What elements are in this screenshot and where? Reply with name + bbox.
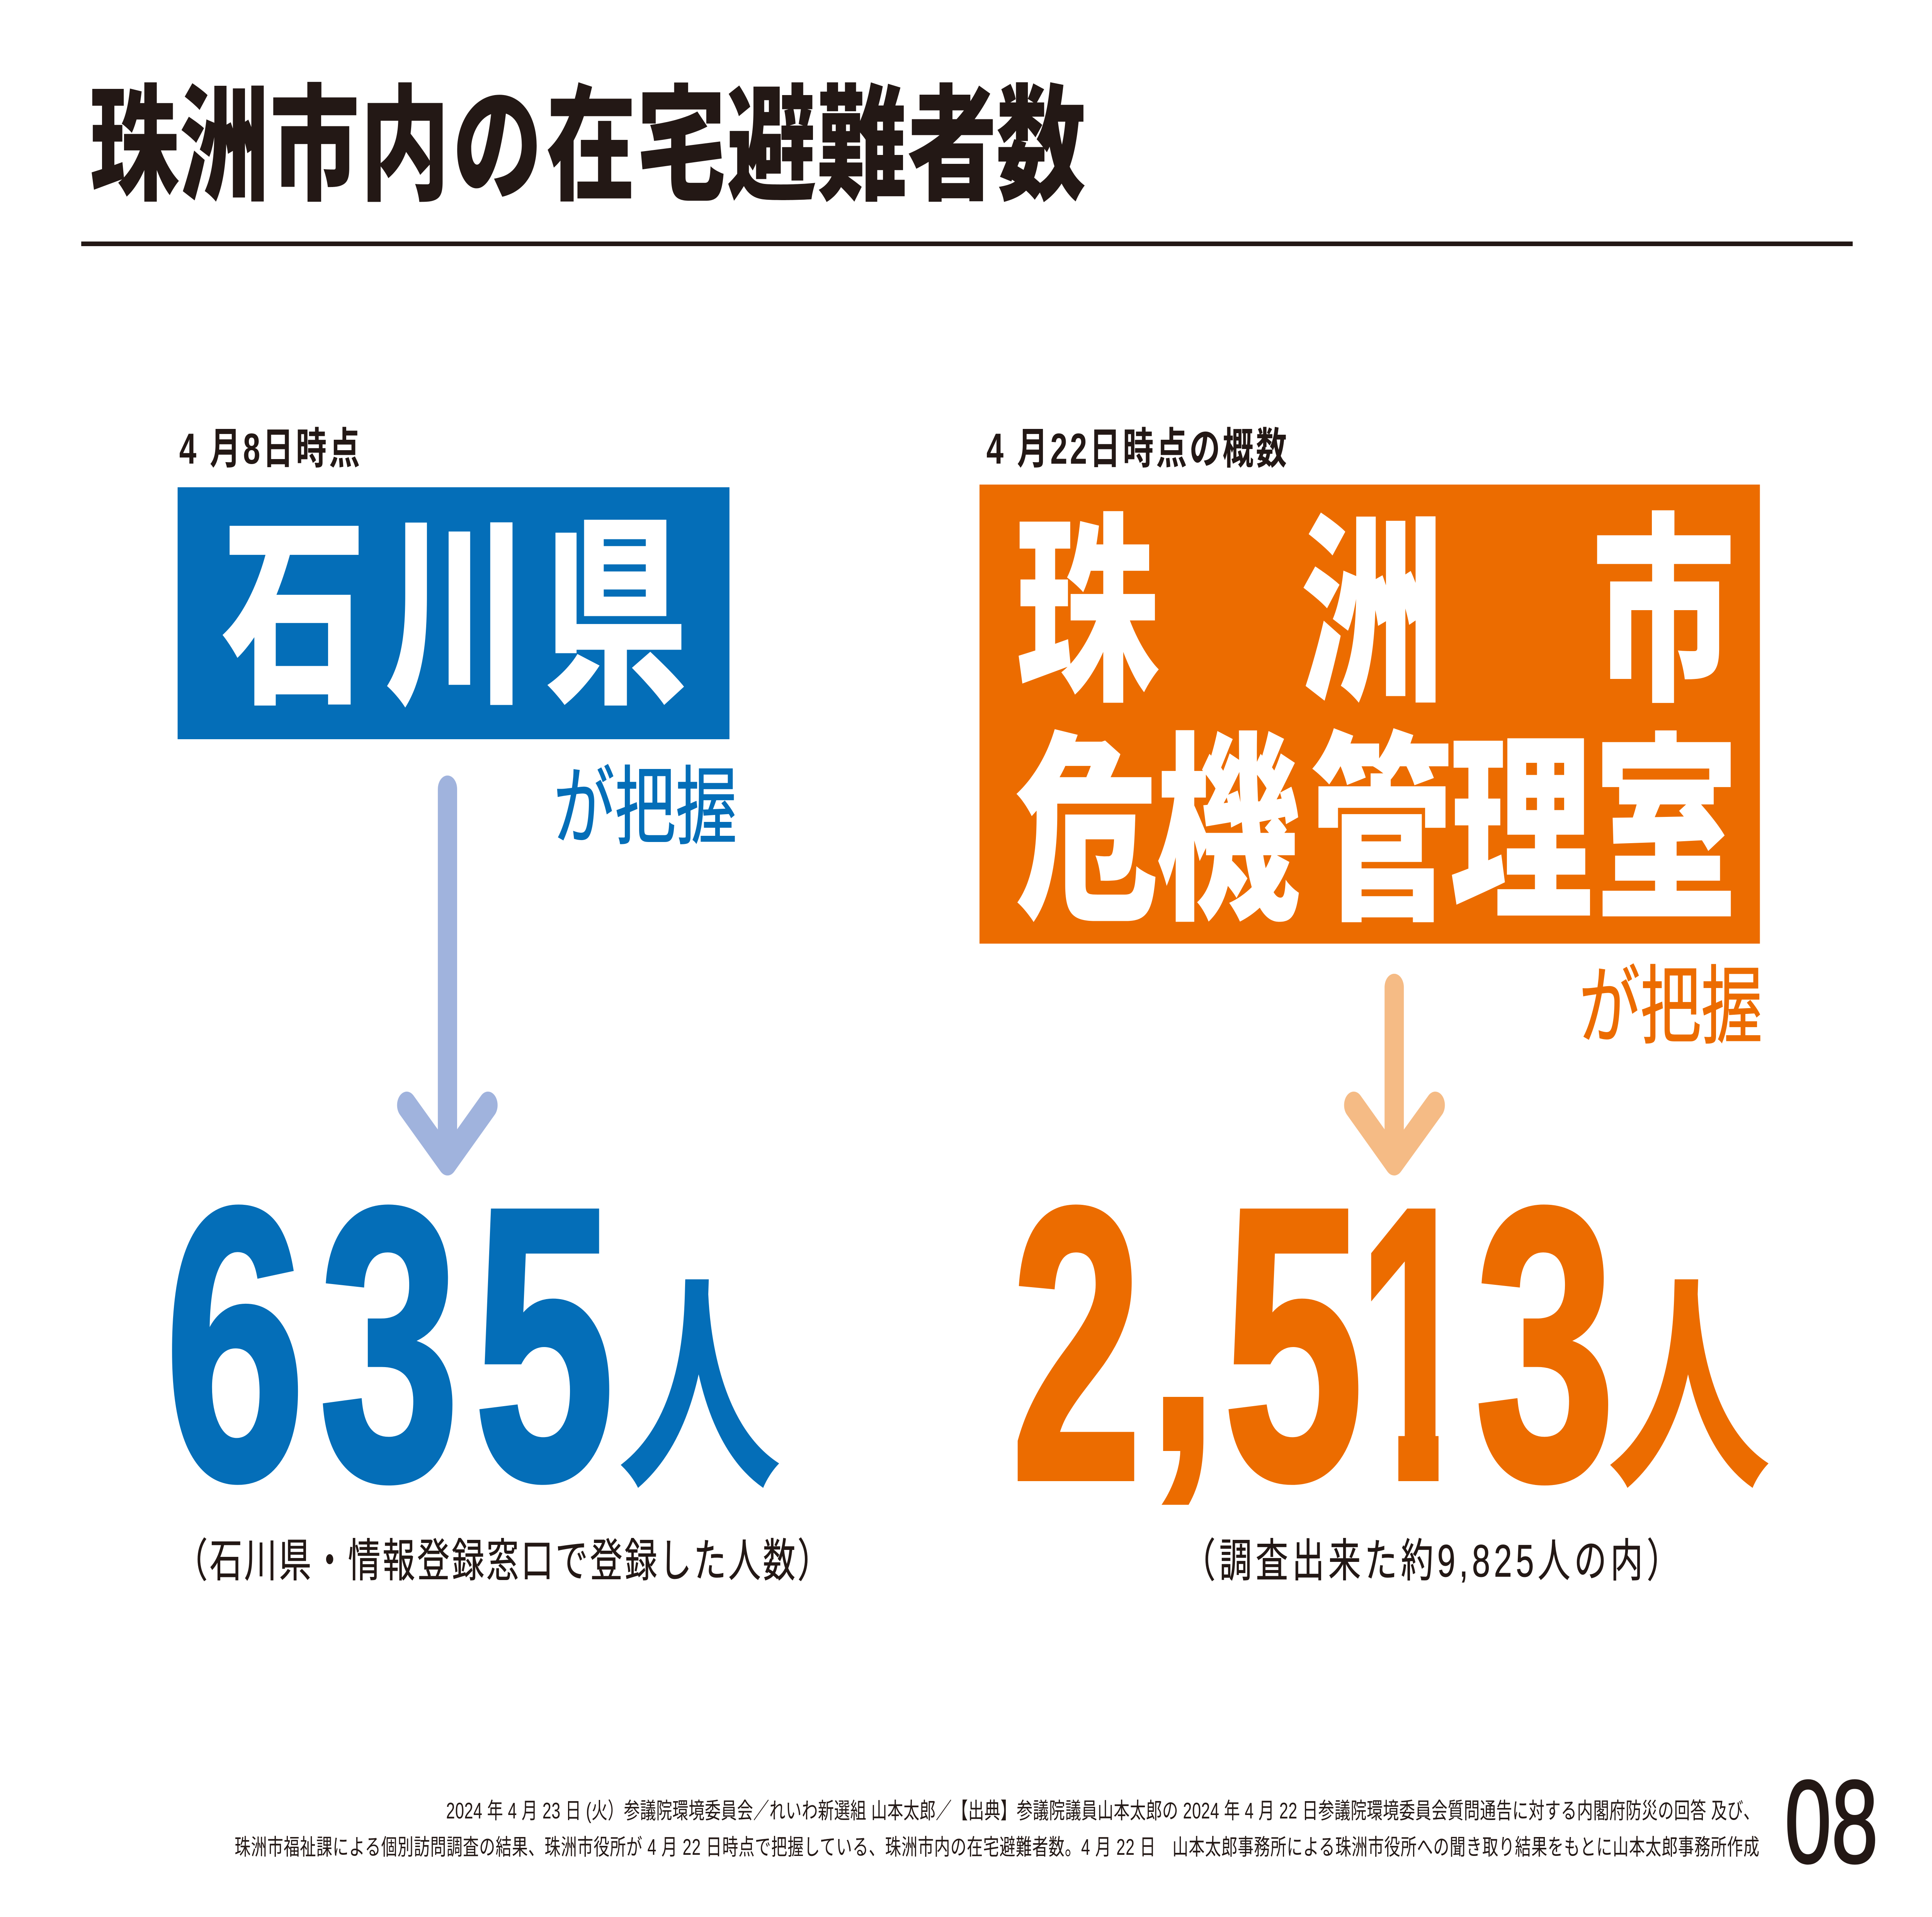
source notes: 珠洲市福祉課による個別訪問調査の結果、珠洲市役所が 4 月 22 日時点で把握している、珠洲市内の在宅避難者数。4 月 22 日 山本太郎事務所による珠洲市役所への聞き取り結果をもとに山本太郎事務所作成 (235, 1834, 1759, 1860)
banner: Ishikawa prefecture: 石川県 (222, 451, 688, 745)
banner: Suzu city crisis management office: 危機管理室 (1015, 668, 1738, 961)
title: 珠洲市内の在宅避難者数 (89, 45, 1086, 226)
label: ga haaku: が把握 (1579, 958, 1762, 1055)
source notes: 2024 年 4 月 23 日 (火）参議院環境委員会／れいわ新選組 山本太郎／【出典】参議院議員山本太郎の 2024 年 4 月 22 日参議院環境委員会質問通告に対する内閣府防災の回答 及び、 (446, 1798, 1759, 1823)
banner: Suzu city crisis management office (980, 449, 1760, 961)
panel: Ishikawa prefecture (165, 425, 830, 1586)
number: 2,513 people: 1 (1359, 1128, 1472, 1561)
caption: Suzu source: （調査出来た約9,825人の内） (1183, 1535, 1679, 1586)
number: 2,513 people: , (1145, 1135, 1221, 1524)
number: 635 people: 人 (618, 1262, 781, 1517)
date label: April 8: 4 月8日時点 (179, 425, 360, 473)
date label: April 22: 4 月22日時点の概数 (986, 425, 1287, 473)
number: 2,513 people: 53 (1223, 1127, 1616, 1561)
page number: 08 (1785, 1756, 1878, 1888)
number: 2,513 people: 人 (1607, 1262, 1770, 1517)
arrow: down orange (1354, 987, 1435, 1162)
source notes (235, 1798, 1759, 1860)
number: 2,513 people: 2 (1011, 1128, 1142, 1561)
arrow: down blue (407, 789, 488, 1162)
label: ga haaku: が把握 (553, 759, 737, 855)
banner: Suzu city crisis management office: 珠洲市 (1015, 449, 1735, 742)
caption: Ishikawa source: （石川県・情報登録窓口で登録した人数） (175, 1535, 830, 1586)
number: 635 people: 635 (165, 1127, 614, 1561)
panel: Suzu city (980, 425, 1770, 1586)
number: 2,513 people (1011, 1127, 1770, 1561)
